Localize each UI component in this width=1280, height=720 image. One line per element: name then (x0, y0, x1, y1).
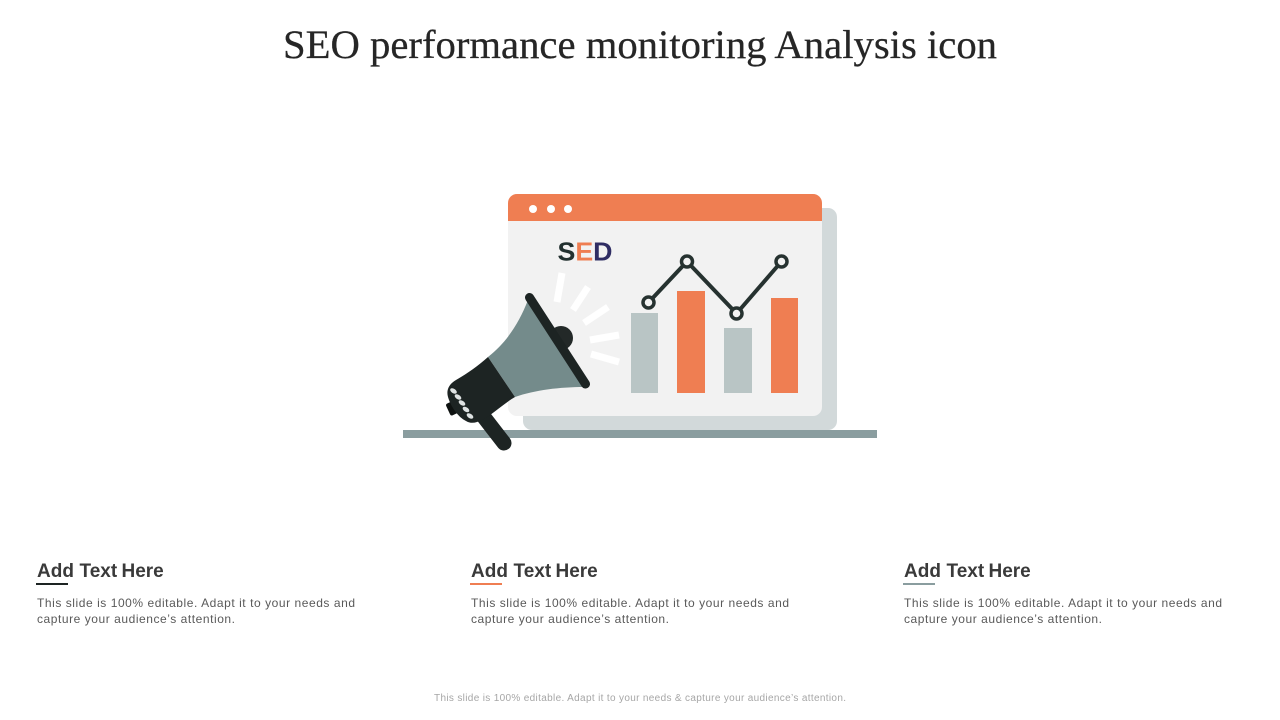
column 3 underline (903, 583, 935, 585)
megaphone body (447, 357, 515, 423)
megaphone back tab (445, 401, 459, 416)
column 2 underline (470, 583, 502, 585)
ground line (403, 430, 877, 438)
column 1 body: This slide is 100% editable. Adapt it to your needs and (37, 596, 355, 610)
column 3 heading: Here (988, 561, 1031, 582)
illustration: SEO dashboard with megaphone (403, 194, 877, 443)
column 2 heading: Add (471, 561, 508, 582)
column 1 body (37, 596, 355, 626)
text block: column 1 (36, 561, 355, 626)
column 2 heading: Here (556, 561, 598, 582)
column 1 heading: Add (37, 561, 74, 582)
browser window (508, 194, 822, 416)
window title bar (508, 194, 822, 221)
column 3 body (904, 596, 1222, 626)
column 1 body: capture your audience’s attention. (37, 612, 235, 626)
text block: column 3 (903, 561, 1222, 626)
window dots (529, 205, 572, 213)
megaphone cone (488, 300, 584, 397)
column 1 heading: Here (122, 561, 164, 582)
column 2 heading: Text (514, 561, 552, 582)
column 3 heading: Add (904, 561, 941, 582)
column 2 body: capture your audience’s attention. (471, 612, 669, 626)
title: SEO performance monitoring Analysis icon (283, 22, 997, 67)
column 1 underline (36, 583, 68, 585)
column 2 body: This slide is 100% editable. Adapt it to your needs and (471, 596, 789, 610)
column 3 body: This slide is 100% editable. Adapt it to your needs and (904, 596, 1222, 610)
column 2 body (471, 596, 789, 626)
SEO label: SED (558, 236, 612, 266)
icon: megaphone (445, 298, 586, 443)
sound rays (557, 273, 619, 362)
bar chart (631, 291, 798, 393)
megaphone handle (480, 412, 504, 443)
column 3 heading: Text (946, 561, 985, 582)
column 1 heading: Text (80, 561, 118, 582)
line chart (643, 256, 787, 319)
window shadow (523, 208, 837, 430)
text block: column 2 (470, 561, 789, 626)
megaphone grip dots (449, 387, 474, 420)
footer note: This slide is 100% editable. Adapt it to your needs & capture your audience’s attention. (434, 693, 846, 704)
megaphone knob (549, 326, 573, 350)
megaphone rim (530, 298, 586, 384)
column 3 body: capture your audience’s attention. (904, 612, 1102, 626)
